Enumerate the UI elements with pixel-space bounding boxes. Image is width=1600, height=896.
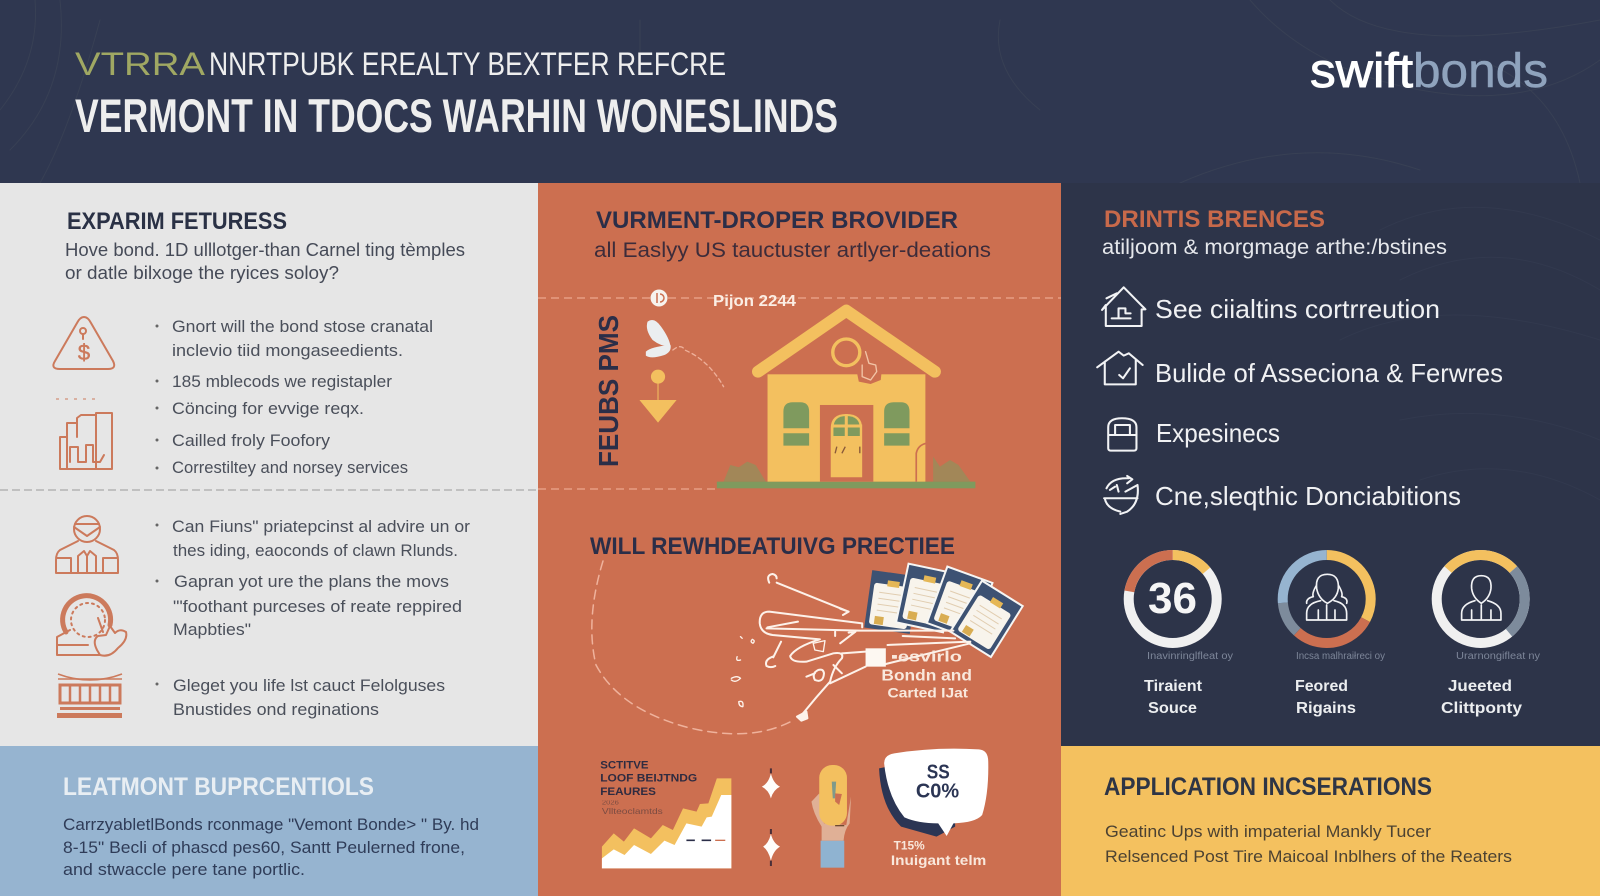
callout: percentage bubble bbox=[879, 749, 988, 837]
panel: header bbox=[0, 0, 1600, 183]
caption: bond list: ▪esvirlo bbox=[891, 650, 962, 666]
main title: VERMONT IN TDOCS WARHIN WONESLINDS bbox=[75, 89, 838, 142]
subheading: right: atiljoom & morgmage arthe:/bstines bbox=[1102, 236, 1447, 259]
paragraph: application: Relsenced Post Tire Maicoal Inblhers of the Reaters bbox=[1105, 847, 1512, 866]
paragraph: blue note bbox=[63, 815, 479, 879]
panel: blue note bbox=[0, 746, 538, 896]
icon: dollar warning triangle: $ bbox=[78, 340, 90, 365]
intro text: or datle bilxoge the ryices soloy? bbox=[65, 263, 339, 283]
vertical label: FEUBS PMS bbox=[593, 315, 624, 467]
icon: house one bbox=[1102, 287, 1145, 326]
eyebrow title bbox=[75, 46, 726, 82]
icon: advisor person bbox=[56, 516, 118, 573]
ring label bbox=[1295, 678, 1356, 717]
ring label: Souce bbox=[1148, 700, 1197, 717]
heading: application: APPLICATION INCSERATIONS bbox=[1104, 773, 1432, 801]
heading: practice: WILL REWHDEATUIVG PRECTIEE bbox=[590, 533, 955, 560]
panel: application bbox=[1061, 746, 1600, 896]
icon: globe arrows bbox=[1104, 476, 1138, 514]
ring label: Tiraient bbox=[1144, 678, 1203, 695]
bullet list: top: Gnort will the bond stose cranatal bbox=[172, 317, 433, 336]
caption: percent term: Inuigant telm bbox=[891, 852, 986, 868]
icon: hand holding phone bbox=[811, 765, 851, 868]
caption: percent term bbox=[891, 838, 986, 868]
small chart caption: 2026 bbox=[602, 801, 620, 807]
ring label: Clittponty bbox=[1441, 700, 1522, 717]
bullet list: bottom: "'foothant purceses of reate reppired bbox=[173, 597, 462, 616]
ring: tirelent source bbox=[1129, 555, 1233, 717]
chart labels: SCTITVE bbox=[600, 759, 649, 771]
list item: See ciialtins cortrreution bbox=[1155, 294, 1440, 324]
bullet list: bottom: Gapran yot ure the plans the movs bbox=[174, 572, 449, 591]
small chart caption: Vllteoclamtds bbox=[602, 807, 663, 816]
ring: tirelent source: Inavinringlfleat oy bbox=[1147, 651, 1233, 662]
icon: dollar warning triangle bbox=[53, 317, 114, 369]
intro text: Hove bond. 1D ulllotger-than Carnel ting tèmples bbox=[65, 240, 465, 260]
bullet list: bottom: Mapbties" bbox=[173, 620, 251, 639]
eyebrow title: NNRTPUBK EREALTY BEXTFER REFCRE bbox=[209, 46, 726, 82]
logo: swift bbox=[1310, 45, 1413, 98]
bullet list: top bbox=[156, 317, 433, 477]
paragraph: application bbox=[1105, 822, 1512, 866]
heading: blue note: LEATMONT BUPRCENTIOLS bbox=[63, 773, 374, 801]
area chart bbox=[600, 759, 731, 868]
panel: provider bbox=[538, 183, 1061, 896]
ring: jueeted clittponty bbox=[1437, 555, 1540, 717]
ring: feored rigains bbox=[1283, 555, 1385, 717]
heading: features: EXPARIM FETURESS bbox=[67, 208, 287, 235]
list item: Expesinecs bbox=[1156, 418, 1280, 448]
bullet list: bottom: Gleget you life lst cauct Felolguses bbox=[173, 676, 445, 695]
bullet list: bottom bbox=[156, 517, 470, 719]
marker dot bbox=[650, 290, 668, 306]
icon: house check bbox=[1097, 352, 1143, 384]
small chart caption bbox=[602, 801, 663, 816]
ring label bbox=[1144, 678, 1203, 717]
icon: lock bbox=[1108, 418, 1136, 451]
ring: feored rigains: Incsa malhraiłreci oy bbox=[1296, 651, 1385, 662]
caption: percent term: T15% bbox=[894, 838, 925, 852]
bullet list: top: 185 mblecods we registapler bbox=[172, 372, 392, 391]
icon: person with hair bbox=[1307, 574, 1347, 620]
paragraph: application: Geatinc Ups with impaterial Mankly Tucer bbox=[1105, 822, 1431, 841]
caption: bond list bbox=[881, 650, 972, 700]
bullet list: bottom: Bnustides ond reginations bbox=[173, 700, 379, 719]
list item: Cne,sleqthic Donciabitions bbox=[1155, 481, 1461, 511]
icon: certificates bbox=[864, 562, 1024, 658]
bullet list: top: Correstiltey and norsey services bbox=[172, 458, 408, 477]
icon: wing, drop and arrow bbox=[639, 320, 724, 423]
ring: jueeted clittponty: Urarnongifleat ny bbox=[1456, 651, 1540, 662]
dashed arc bbox=[592, 561, 790, 734]
ring label bbox=[1441, 678, 1522, 717]
chart labels: FEAURES bbox=[600, 786, 656, 798]
paragraph: blue note: and stwaccle pere tane portlic. bbox=[63, 860, 305, 879]
ring label: Jueeted bbox=[1448, 678, 1512, 695]
icon: house bbox=[717, 311, 975, 488]
intro text bbox=[65, 240, 465, 283]
bullet list: top: Cöncing for evvige reqx. bbox=[172, 399, 364, 418]
callout: percentage bubble: SS bbox=[927, 761, 950, 783]
list item: Bulide of Asseciona & Ferwres bbox=[1155, 358, 1503, 388]
bullet list: top: inclevio tiid mongaseedients. bbox=[172, 341, 403, 360]
icon: person bbox=[1462, 576, 1501, 620]
logo: bonds bbox=[1413, 45, 1548, 98]
icon: hand line art bbox=[731, 574, 970, 721]
subheading: provider: all Easlyy US tauctuster artlyer-deations bbox=[594, 239, 991, 262]
bullet list: bottom: Can Fiuns" priatepcinst al advire un or bbox=[172, 517, 470, 536]
heading: right: DRINTIS BRENCES bbox=[1104, 206, 1325, 233]
bullet list: top: Cailled froly Foofory bbox=[172, 431, 331, 450]
bullet list: bottom: thes iding, eaoconds of clawn Rlunds. bbox=[173, 541, 458, 560]
callout: percentage bubble: C0% bbox=[916, 781, 959, 803]
icon: dial and hand bbox=[57, 596, 126, 656]
caption: bond list: Bondn and bbox=[881, 668, 972, 685]
caption: bond list: Carted IJat bbox=[888, 684, 968, 700]
icon: columns bbox=[57, 674, 122, 718]
date label: Pijon 2244 bbox=[713, 293, 796, 310]
chart labels: LOOF BEIJTNDG bbox=[600, 773, 697, 785]
ring label: Feored bbox=[1295, 678, 1348, 695]
panel: right dark bbox=[1061, 183, 1600, 746]
heading: provider: VURMENT-DROPER BROVIDER bbox=[596, 207, 958, 234]
paragraph: blue note: CarrzyabletlBonds rconmage "Vemont Bonde> " By. hd bbox=[63, 815, 479, 834]
ring: tirelent source: 36 bbox=[1148, 574, 1197, 623]
icon: sparkles bbox=[762, 768, 780, 866]
panel: features bbox=[0, 183, 538, 746]
paragraph: blue note: 8-15" Becli of phascd pes60, Santt Peulerned frone, bbox=[63, 838, 465, 857]
icon: buildings bbox=[60, 413, 112, 469]
logo bbox=[1310, 45, 1548, 98]
eyebrow title: VTRRA bbox=[75, 46, 206, 82]
chart labels bbox=[600, 759, 697, 798]
ring label: Rigains bbox=[1296, 700, 1356, 717]
